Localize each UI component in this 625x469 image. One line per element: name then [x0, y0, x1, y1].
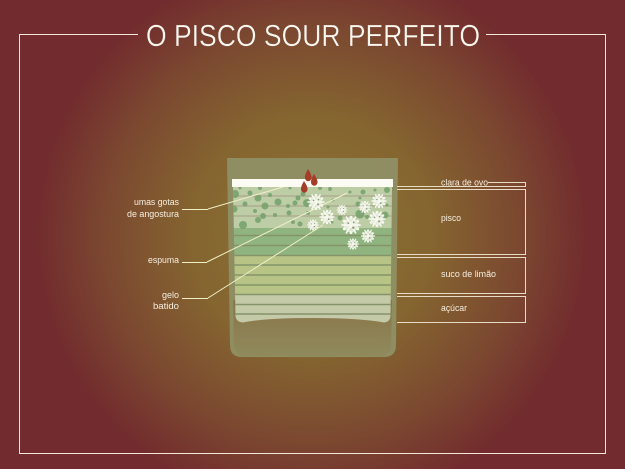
label: gelo batido	[153, 290, 179, 311]
label: umas gotas de angostura: de angostura	[127, 209, 179, 219]
bracket: acucar	[397, 296, 526, 322]
label: umas gotas de angostura	[127, 197, 179, 219]
glass body	[227, 158, 398, 357]
label: clara de ovo: clara de ovo	[441, 178, 488, 188]
label: acucar: açúcar	[441, 303, 467, 313]
ice crystals	[308, 194, 386, 250]
leader lines over the drink	[207, 187, 347, 298]
glass base	[233, 300, 392, 356]
label: espuma: espuma	[148, 255, 179, 265]
label: gelo batido: batido	[153, 301, 179, 311]
foam dots	[230, 186, 390, 229]
left leader stubs	[182, 210, 208, 298]
bracket: pisco	[397, 190, 526, 254]
liquid layers	[230, 186, 395, 323]
layer stripes	[230, 236, 395, 314]
foam layer	[230, 187, 395, 228]
label: umas gotas de angostura: umas gotas	[134, 197, 179, 207]
bracket: suco de limao	[397, 258, 526, 294]
label: suco de limao: suco de limão	[441, 269, 496, 279]
bracket: clara de ovo	[397, 182, 526, 186]
title: O PISCO SOUR PERFEITO	[146, 19, 480, 53]
label: pisco: pisco	[441, 213, 461, 223]
label: gelo batido: gelo	[162, 290, 179, 300]
egg white layer	[232, 179, 393, 187]
angostura drops	[301, 169, 318, 193]
glass	[207, 158, 398, 357]
lime juice layer	[230, 255, 395, 295]
sugar layer	[230, 295, 395, 323]
pisco layer	[230, 228, 395, 255]
foam stripes	[230, 196, 395, 216]
